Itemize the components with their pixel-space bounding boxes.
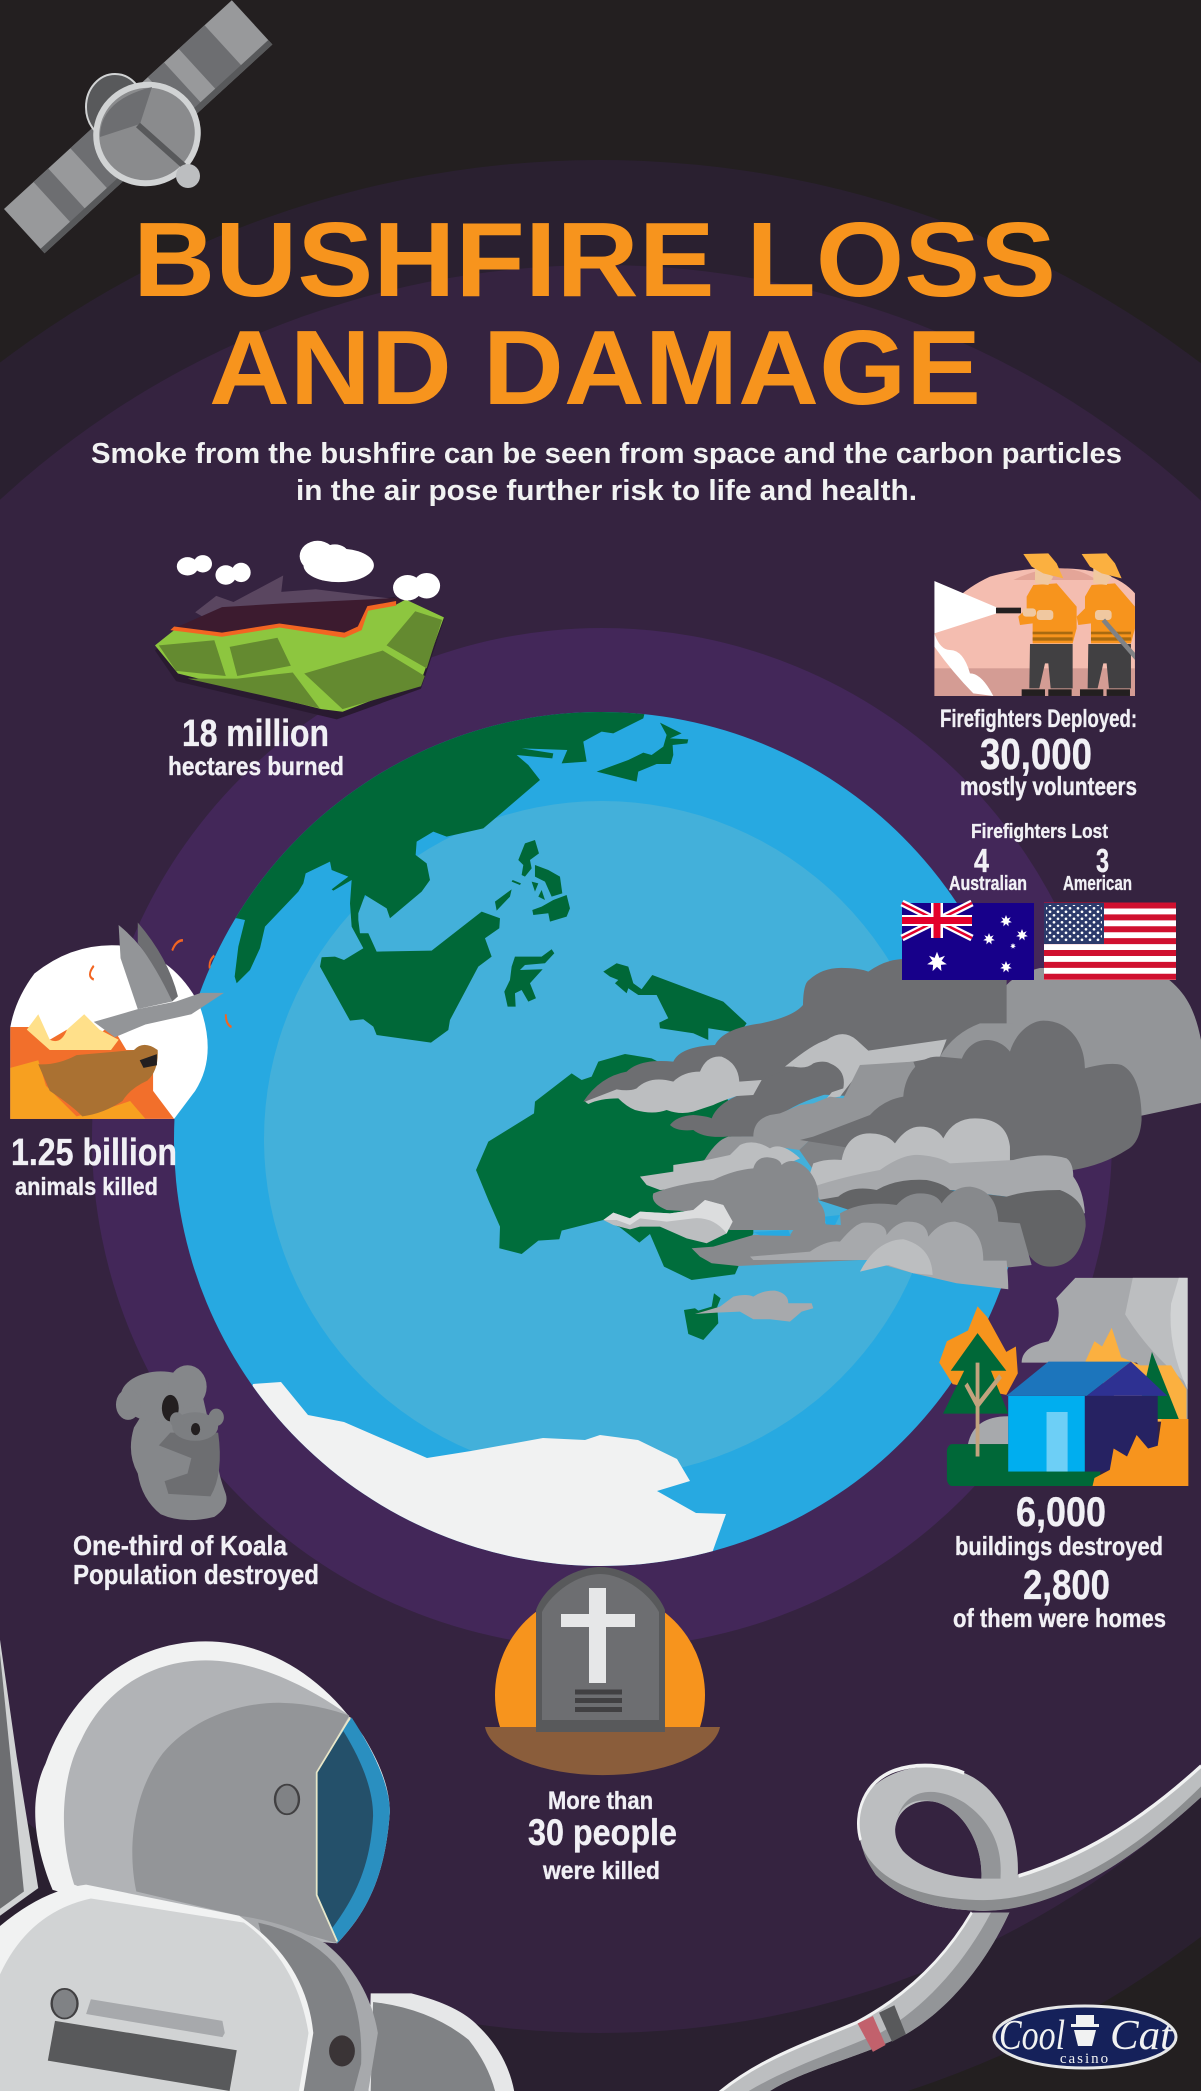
icon: animals in fire bbox=[10, 922, 232, 1119]
satellite bbox=[4, 0, 272, 253]
stat: firefighters lost: Firefighters Lost bbox=[971, 821, 1108, 843]
stat: koala population: Population destroyed bbox=[73, 1559, 319, 1590]
stat: buildings destroyed: buildings destroyed bbox=[955, 1531, 1163, 1561]
stat: people killed: More than bbox=[548, 1787, 653, 1815]
shoulder and arm bbox=[368, 1993, 514, 2091]
logo: cool cat casino: Cool bbox=[999, 2013, 1065, 2059]
title bbox=[133, 201, 1056, 427]
helmet bbox=[35, 1641, 390, 1943]
stat: people killed bbox=[528, 1787, 677, 1885]
icon: tombstone bbox=[485, 1567, 720, 1776]
air hose bbox=[707, 1765, 1201, 2091]
smoke clouds bbox=[583, 959, 1201, 1322]
hose loop bbox=[858, 1765, 1201, 1911]
stat: hectares burned: 18 million bbox=[182, 713, 329, 755]
stat: firefighters lost: 4 bbox=[974, 842, 990, 879]
stat: firefighters deployed bbox=[940, 705, 1137, 801]
subtitle: in the air pose further risk to life and health. bbox=[296, 475, 917, 507]
stat: buildings destroyed bbox=[953, 1488, 1166, 1633]
stat: animals killed: 1.25 billion bbox=[11, 1132, 177, 1174]
icon: american flag bbox=[1044, 903, 1176, 980]
torso bbox=[0, 1885, 313, 2091]
title: AND DAMAGE bbox=[209, 309, 981, 427]
firefighter bbox=[1018, 553, 1077, 696]
title: BUSHFIRE LOSS bbox=[133, 201, 1056, 319]
icon: firefighters bbox=[934, 553, 1137, 696]
australia bbox=[476, 1054, 753, 1340]
logo: cool cat casino: casino bbox=[1060, 2051, 1110, 2067]
stat: buildings destroyed: 2,800 bbox=[1023, 1561, 1110, 1608]
solar panel bbox=[4, 0, 272, 253]
astronaut bbox=[0, 1640, 514, 2091]
stat: buildings destroyed: of them were homes bbox=[953, 1603, 1166, 1633]
logo: cool cat casino: Cat bbox=[1110, 2013, 1173, 2059]
stat: firefighters deployed: Firefighters Deployed: bbox=[940, 705, 1137, 733]
stat: firefighters lost: American bbox=[1063, 873, 1132, 895]
icon: koala bbox=[116, 1365, 227, 1520]
stat: koala population bbox=[73, 1530, 319, 1590]
stat: people killed: were killed bbox=[542, 1857, 660, 1885]
icon: burning house bbox=[939, 1278, 1188, 1486]
stat: animals killed bbox=[11, 1132, 177, 1201]
stat: koala population: One-third of Koala bbox=[73, 1530, 287, 1561]
stat: buildings destroyed: 6,000 bbox=[1016, 1488, 1106, 1535]
stat: hectares burned bbox=[168, 713, 344, 781]
stat: firefighters deployed: mostly volunteers bbox=[960, 771, 1137, 801]
orbit ring bbox=[92, 628, 1112, 1648]
stat: firefighters lost bbox=[949, 821, 1132, 895]
stat: firefighters deployed: 30,000 bbox=[980, 730, 1092, 779]
stat: firefighters lost: 3 bbox=[1096, 842, 1109, 879]
asia and indonesia landmass bbox=[234, 712, 747, 1043]
globe bbox=[174, 680, 1028, 1600]
lower hose bbox=[707, 1912, 1009, 2091]
stat: firefighters lost: Australian bbox=[949, 873, 1027, 895]
antarctica bbox=[252, 1382, 726, 1566]
stat: people killed: 30 people bbox=[528, 1812, 677, 1853]
icon: burned land bbox=[155, 541, 444, 719]
stat: hectares burned: hectares burned bbox=[168, 751, 344, 781]
subtitle: Smoke from the bushfire can be seen from space and the carbon particles bbox=[91, 438, 1122, 470]
dish bbox=[82, 71, 212, 197]
firefighter bbox=[1077, 553, 1137, 696]
icon: australian flag bbox=[902, 903, 1034, 980]
stat: animals killed: animals killed bbox=[15, 1173, 158, 1201]
logo: cool cat casino bbox=[994, 2006, 1176, 2068]
subtitle bbox=[91, 438, 1122, 507]
